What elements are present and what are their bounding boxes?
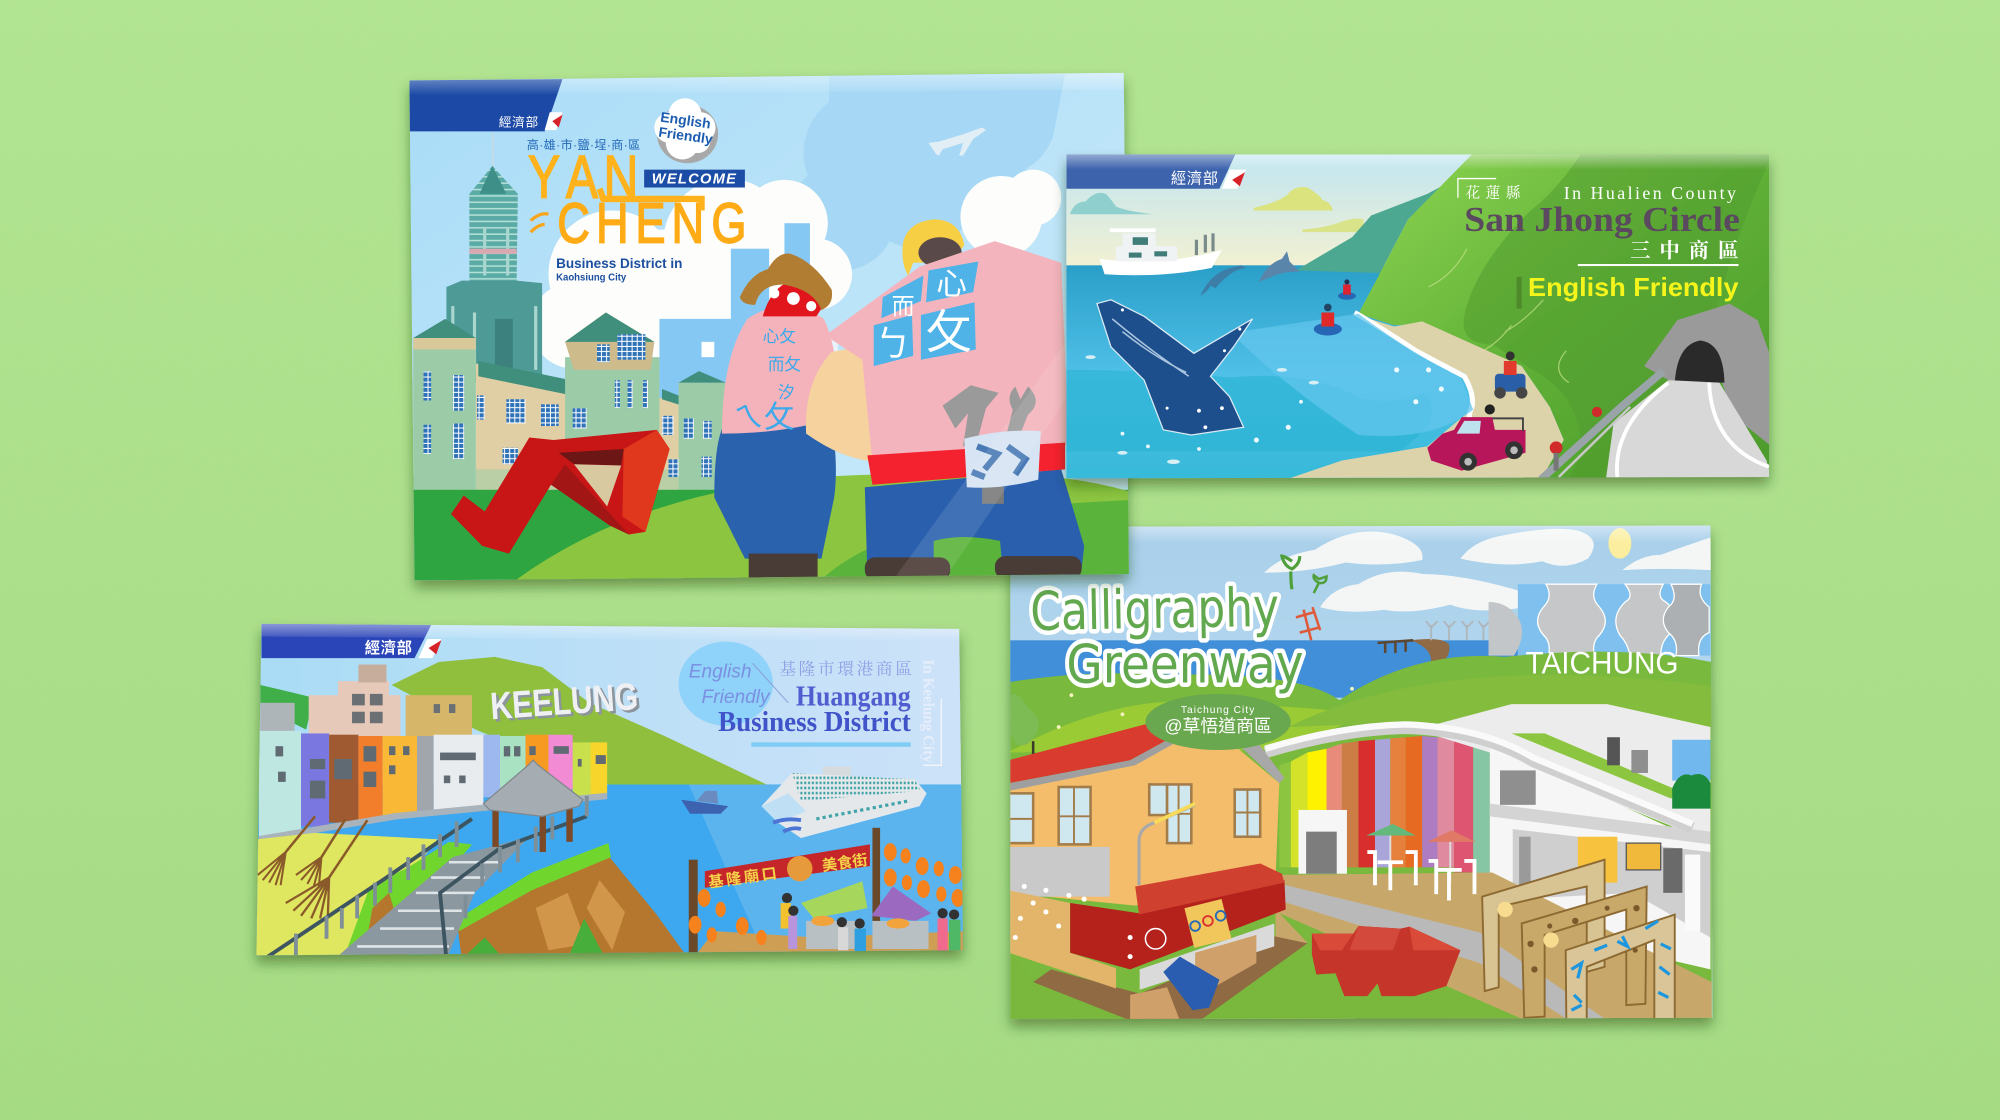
night market: [689, 828, 964, 957]
sea: [254, 784, 966, 958]
gates with calligraphy: [1482, 860, 1675, 1020]
postcard: Calligraphy Greenway, Taichung: [1008, 523, 1716, 1023]
market banner: [705, 844, 870, 892]
green mountains: [260, 657, 767, 784]
green mountain: [1358, 152, 1773, 480]
sea waves: [1066, 314, 1473, 464]
red sculpture: [451, 430, 670, 554]
cruise ship: [761, 767, 927, 838]
title: Huangang Business District: In Keelung City: [919, 659, 936, 763]
opera house: [1489, 584, 1710, 656]
KEELUNG sign: KEELUNG: [492, 678, 642, 731]
orange heritage house: [1009, 723, 1284, 906]
shirt logo: 心: [936, 268, 967, 302]
pavilion: [483, 760, 583, 852]
title: Yan Cheng: [527, 137, 746, 284]
distant cliff: [1296, 184, 1446, 273]
red sculpture: [1312, 926, 1460, 996]
tools and pouch: [943, 385, 1041, 504]
header: Ministry of Economic Affairs: [261, 624, 441, 658]
rainbow wall: [1279, 736, 1490, 878]
shirt logo: [874, 261, 978, 366]
red corner shop: [1009, 864, 1286, 1010]
tunnel: [1606, 304, 1772, 480]
badge: district name: @草悟道商區: [1164, 716, 1272, 736]
plaza with elevator and tables: [1276, 810, 1712, 1020]
food stalls: [801, 881, 931, 949]
worker: woman with hat: 而攵: [768, 355, 801, 374]
badge: English Friendly: [654, 98, 718, 163]
cliff: [344, 842, 689, 959]
clouds and sun: [1264, 528, 1712, 612]
whale tail: [1097, 300, 1253, 435]
title: San Jhong Circle: English Friendly: [1528, 272, 1739, 302]
visitors: [781, 893, 960, 953]
title: Yan Cheng: Kaohsiung City: [556, 273, 627, 284]
historic green building: [413, 312, 726, 497]
yellow-green land: [254, 833, 438, 959]
header: Ministry of Economic Affairs: [1066, 153, 1246, 189]
title: Huangang Business District: Business District: [718, 707, 911, 738]
shirt logo: 而: [892, 293, 915, 319]
worker: woman with hat: ㄟ攵: [733, 400, 795, 434]
title: Calligraphy Greenway: [1030, 576, 1304, 695]
stairs with railings: [268, 796, 587, 959]
market banner: 基隆廟口: [707, 864, 778, 892]
title: Yan Cheng: YAN: [528, 144, 638, 211]
title: San Jhong Circle: 花蓮縣: [1466, 184, 1521, 202]
small navy boat: [681, 791, 728, 814]
guardrail: [1541, 371, 1663, 480]
title: Huangang Business District: [679, 642, 941, 765]
surf: [1355, 312, 1472, 425]
title: San Jhong Circle: San Jhong Circle: [1464, 201, 1740, 239]
icons: sprouts and hash mark: [1282, 556, 1327, 640]
shirt logo: ㄅ: [875, 324, 911, 364]
colourful harbour houses: [259, 731, 607, 838]
85 Sky Tower: [446, 134, 542, 383]
badge: district name: Taichung City: [1181, 705, 1255, 716]
title: Yan Cheng: 高·雄·市·鹽·埕·商·區: [527, 137, 640, 152]
worker: woman with hat: 心攵: [763, 327, 796, 346]
quad bike rider: [1494, 351, 1527, 399]
worker: woman with hat: [714, 254, 838, 579]
title: Calligraphy Greenway: Calligraphy: [1030, 576, 1280, 643]
header: Ministry of Economic Affairs: [409, 79, 562, 131]
airplane: [929, 128, 986, 156]
lawn: [1009, 913, 1526, 1020]
badge: English Friendly: Friendly: [658, 124, 714, 147]
grass: [408, 473, 1135, 585]
beach: [1286, 315, 1564, 480]
postcard: San Jhong Circle, Hualien: [1064, 152, 1773, 482]
shirt logo: 攵: [926, 306, 972, 358]
title: San Jhong Circle: [1458, 179, 1740, 309]
lanterns: [689, 843, 964, 945]
title: Huangang Business District: Huangang: [796, 681, 911, 712]
swimmers on tubes: [1314, 279, 1356, 335]
pink jeep: [1427, 404, 1526, 471]
blue city silhouette: [659, 223, 810, 408]
title: Yan Cheng: Business District in: [556, 255, 682, 271]
label: Taichung: TAICHUNG: [1526, 644, 1679, 680]
market banner: 美食街: [821, 851, 869, 875]
welcome tag: WELCOME: [652, 172, 737, 188]
shoreline: [259, 796, 607, 839]
title: Huangang Business District: Friendly: [702, 687, 771, 708]
brooms: [258, 816, 367, 918]
white clouds: [531, 170, 1061, 381]
title: Huangang Business District: 基隆市環港商區: [779, 660, 912, 679]
wind turbines: [1426, 621, 1490, 640]
header: Ministry of Economic Affairs: 經濟部: [365, 639, 412, 657]
sea and pier: [1008, 639, 1518, 698]
postcard: Yan Cheng, Kaohsiung: [408, 55, 1135, 585]
deck and steps: [1033, 923, 1307, 1020]
green hills: [1008, 652, 1712, 1019]
header: Ministry of Economic Affairs: 經濟部: [499, 114, 539, 129]
badge: district name: [1145, 694, 1291, 750]
worker: man with helmet: [806, 219, 1084, 580]
badge: English Friendly: English: [659, 109, 712, 131]
white museum building: [1265, 704, 1710, 969]
KEELUNG sign: KEELUNG: [489, 675, 639, 728]
tour boat: [1099, 228, 1222, 275]
header: Ministry of Economic Affairs: 經濟部: [1171, 171, 1218, 188]
title: Calligraphy Greenway: Greenway: [1066, 632, 1304, 695]
title: Yan Cheng: CHENG: [557, 192, 746, 254]
worker: woman with hat: 汐: [778, 383, 795, 402]
title: San Jhong Circle: In Hualien County: [1564, 183, 1736, 203]
title: Huangang Business District: English: [689, 661, 752, 682]
postcard: Huangang, Keelung: [254, 621, 966, 959]
blue background clouds: [800, 74, 1065, 270]
dolphins: [1200, 251, 1300, 296]
back buildings: [260, 665, 472, 736]
windows: [423, 334, 712, 482]
title: San Jhong Circle: 三中商區: [1630, 240, 1739, 263]
sky clouds: [1070, 187, 1364, 232]
